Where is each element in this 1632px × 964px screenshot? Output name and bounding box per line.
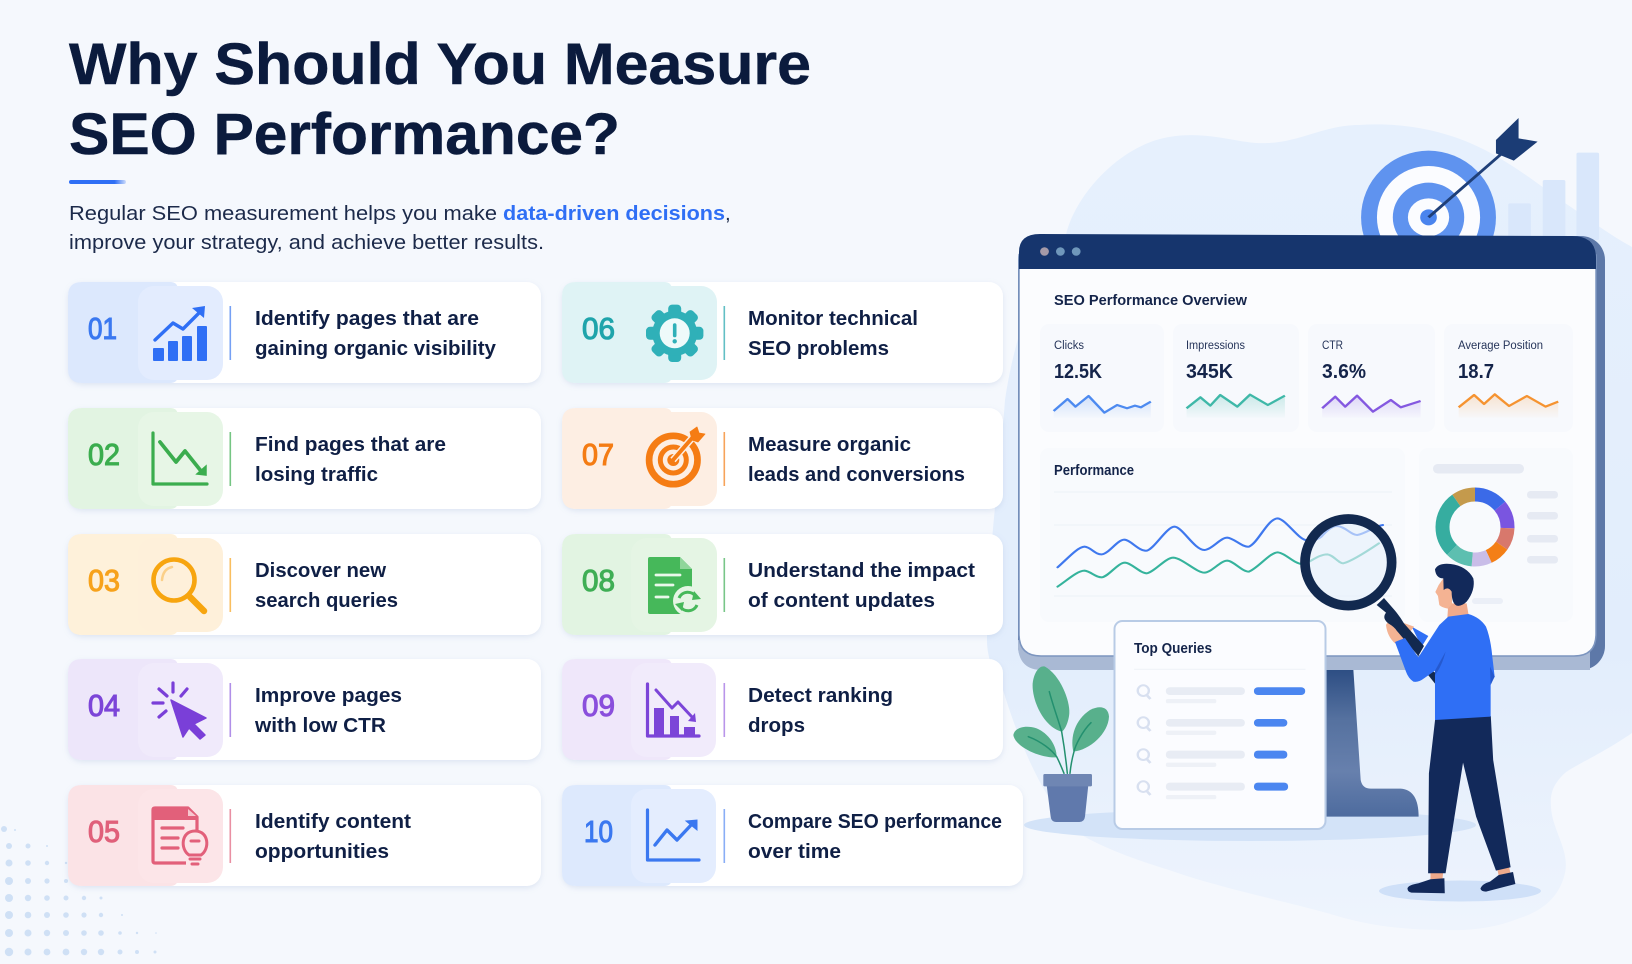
label: Monitor technical [748,307,918,330]
dashboard heading: SEO Performance Overview [1054,293,1248,309]
monitor [1018,234,1605,670]
screen [1019,255,1596,656]
card 03 [68,534,541,635]
intro paragraph [69,202,731,254]
label: Measure organic [748,433,911,456]
line series [1058,518,1383,587]
label: drops [748,714,805,737]
icon: click cursor [153,683,206,739]
number 09: 09 [582,688,615,723]
divider [230,683,231,737]
label: over time [748,840,841,863]
person shadow [1379,880,1541,902]
number 01: 01 [88,311,117,346]
divider [724,809,725,863]
label: leads and conversions [748,463,965,486]
person with magnifying glass [1305,519,1541,902]
intro paragraph: , [725,202,731,225]
icon: magnifier [154,560,204,611]
number 10: 10 [584,814,613,849]
label [255,433,446,486]
label [748,559,975,612]
metric card: average position: 18.7 [1458,361,1494,383]
number 05: 05 [88,814,120,849]
label: of content updates [748,589,935,612]
metric card: impressions: Impressions [1186,340,1245,352]
metric card: impressions [1173,324,1299,432]
divider [724,306,725,360]
title underline accent [69,180,126,184]
card 07 [562,408,1003,509]
icon: document refresh [648,557,703,616]
query row 3 [1138,749,1287,767]
label [748,810,1002,863]
query row 2 [1138,717,1287,735]
metric card: clicks: Clicks [1054,340,1084,352]
number 08: 08 [582,563,615,598]
upper body, hand and magnifying glass [1305,519,1495,720]
donut legend bars [1472,491,1558,604]
label [254,684,402,737]
number 03: 03 [88,563,120,598]
label [255,559,398,612]
label [748,684,893,737]
card heading: Top Queries [1134,641,1212,657]
label: gaining organic visibility [255,337,497,360]
intro paragraph: Regular SEO measurement helps you make [69,202,497,225]
label: Discover new [255,559,386,582]
card 08 [562,534,1003,635]
background bar chart behind monitor [1508,153,1599,240]
window title bar [1019,234,1596,269]
decorative blob backdrop [987,124,1632,930]
divider [230,558,231,612]
icon: upward trend chart [648,810,699,860]
label: Compare SEO performance [748,810,1002,833]
label: with low CTR [254,714,386,737]
metric card: clicks: 12.5K [1054,361,1102,383]
metric card: clicks [1040,324,1164,432]
legs and shoes [1407,716,1515,893]
metric card: CTR: 3.6% [1322,361,1366,383]
metric card: impressions: 345K [1186,361,1234,383]
label: Find pages that are [255,433,446,456]
number 06: 06 [582,311,615,346]
sweater [1395,614,1495,720]
query row 1 [1138,685,1305,703]
metric card: average position [1444,324,1573,432]
neck and face [1447,603,1469,618]
number 02: 02 [88,437,120,472]
label [748,433,965,486]
magnifying glass lens [1305,519,1392,606]
dot pattern [1,826,157,956]
label [748,307,918,360]
performance line chart panel [1040,448,1405,622]
monitor stand [1327,667,1419,817]
window control dots [1040,247,1081,256]
icon: ranking drop chart [648,684,699,736]
label: Improve pages [255,684,402,707]
ground shadow [1024,809,1476,841]
card 09 [562,659,1003,760]
intro paragraph: data-driven decisions [503,202,725,225]
query row 4 [1138,781,1288,799]
number 07: 07 [582,437,614,472]
magnifier handle [1377,598,1424,656]
label: search queries [255,589,398,612]
intro paragraph: improve your strategy, and achieve better results. [69,231,544,254]
donut chart panel [1419,448,1573,622]
label: losing traffic [255,463,378,486]
icon: content document with bulb [153,808,207,864]
icon: gear with warning [646,305,703,362]
icon: falling traffic chart [153,433,207,484]
donut chart [1442,494,1508,560]
card 01 [68,282,541,383]
label [255,307,497,360]
label: Identify pages that are [255,307,479,330]
divider [724,558,725,612]
icon: target with arrow [1361,118,1538,284]
metric card: CTR: CTR [1322,340,1343,352]
divider [724,683,725,737]
card 02 [68,408,541,509]
chart heading: Performance [1054,463,1134,479]
card 04 [68,659,541,760]
hair [1435,564,1474,606]
label: opportunities [255,840,389,863]
far sleeve [1412,627,1428,647]
top queries card [1114,621,1326,829]
hand [1386,622,1414,643]
label: SEO problems [748,337,889,360]
card 10 [562,785,1023,886]
divider [230,432,231,486]
number 04: 04 [88,688,120,723]
label [255,810,411,863]
icon: target with arrow [649,427,705,484]
divider [230,809,231,863]
divider [230,306,231,360]
label: Identify content [255,810,411,833]
divider [724,432,725,486]
title: SEO Performance? [69,102,620,167]
label: Understand the impact [748,559,975,582]
icon: growth chart [153,306,207,361]
card 06 [562,282,1003,383]
plant [1013,666,1109,822]
card 05 [68,785,541,886]
metric card: CTR [1308,324,1435,432]
title: Why Should You Measure [69,32,811,97]
metric card: average position: Average Position [1458,340,1543,352]
title [69,32,811,167]
label: Detect ranking [748,684,893,707]
